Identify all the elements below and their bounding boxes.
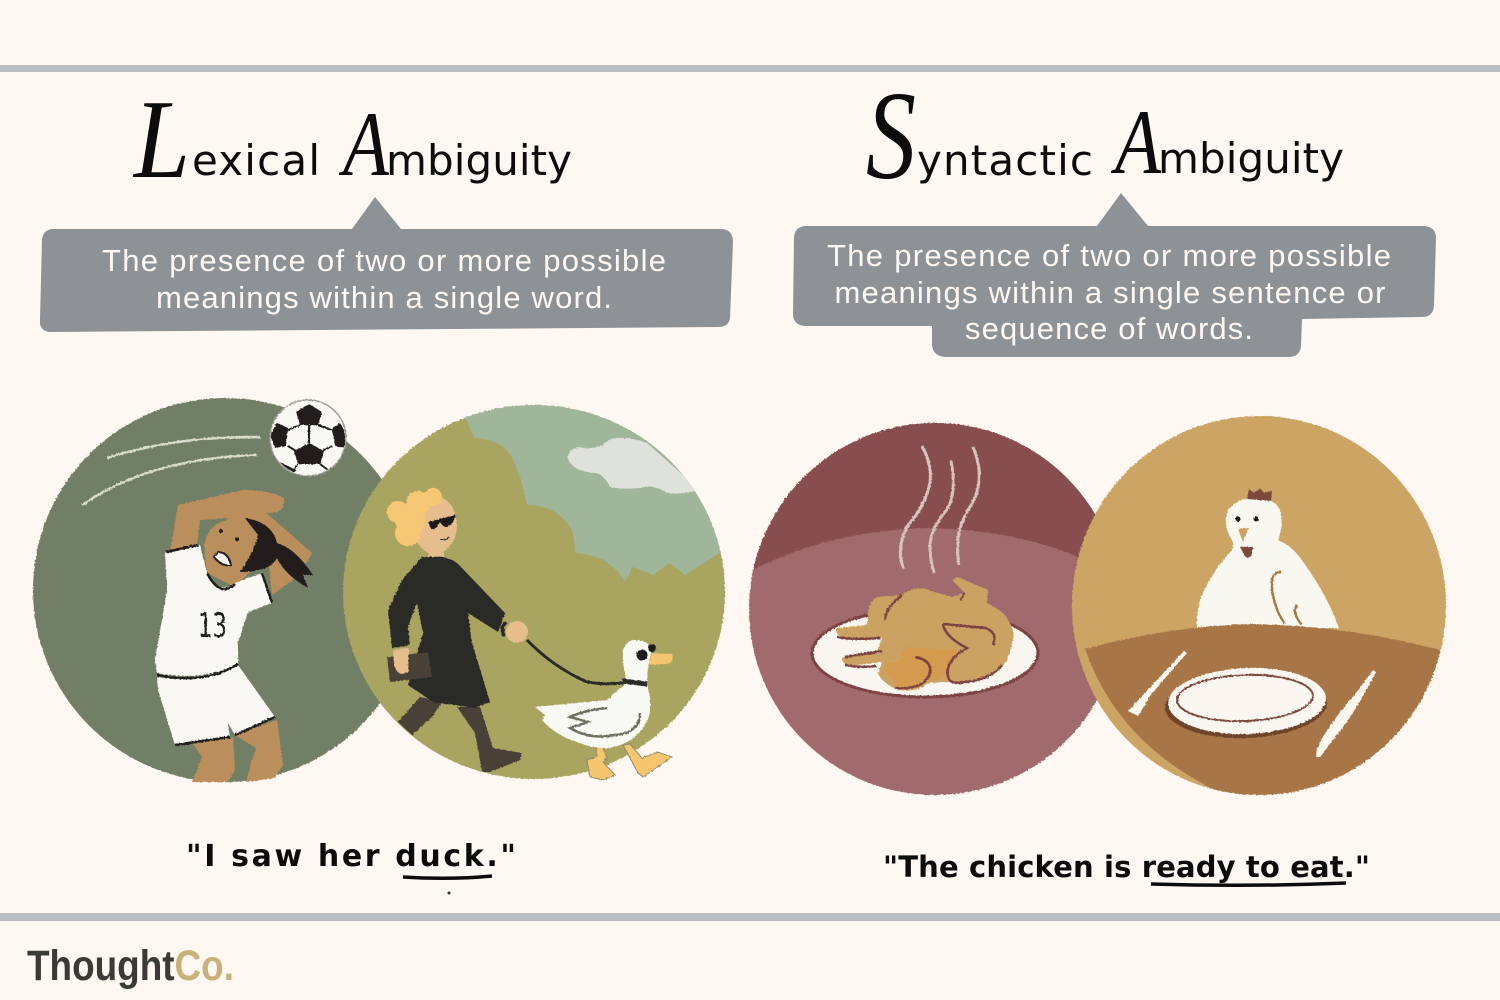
plate: [1164, 669, 1328, 741]
title: Syntactic Ambiguity: A: [1110, 91, 1162, 193]
callout: lexical definition: meanings within a single word.: [156, 280, 612, 315]
leash: [527, 640, 622, 684]
plate: [812, 609, 1038, 697]
player: [155, 490, 313, 782]
quote: I saw her duck: "I saw her duck.": [186, 839, 516, 874]
title: Lexical Ambiguity: [132, 78, 572, 202]
title: Lexical Ambiguity: L: [132, 78, 190, 202]
title: Lexical Ambiguity: A: [338, 93, 390, 195]
illustration: soccer player heading a ball: [33, 398, 417, 782]
steam: [900, 446, 979, 573]
quote: I saw her duck: [186, 839, 516, 894]
table: [1085, 624, 1450, 800]
illustration: woman walking a duck: [343, 380, 740, 780]
callout: syntactic definition: The presence of two or more possible: [827, 238, 1391, 273]
sky: [464, 404, 722, 582]
fork: [1128, 651, 1187, 716]
chicken: [837, 577, 1013, 691]
title: Syntactic Ambiguity: [866, 67, 1344, 206]
soccer ball: [270, 400, 347, 478]
quote: The chicken is ready to eat: "The chicken is ready to eat.": [883, 850, 1370, 884]
cloud: [567, 438, 700, 494]
title: Lexical Ambiguity: exical: [192, 136, 320, 185]
player: 13: [198, 606, 227, 646]
callout: lexical definition: The presence of two or more possible: [102, 243, 666, 278]
callout: syntactic definition: sequence of words.: [965, 311, 1253, 346]
title: Lexical Ambiguity: mbiguity: [386, 136, 572, 185]
title: Syntactic Ambiguity: mbiguity: [1158, 134, 1344, 183]
woman: [387, 488, 528, 772]
callout: lexical definition: [40, 197, 733, 332]
chicken: [1197, 488, 1339, 628]
title: Syntactic Ambiguity: yntactic: [917, 136, 1093, 185]
illustration: roast chicken on a plate: [748, 422, 1097, 796]
duck: [535, 640, 673, 780]
table edge: [753, 422, 1095, 570]
callout: syntactic definition: [793, 193, 1436, 357]
logo: ThoughtCo.: ThoughtCo.: [27, 942, 234, 990]
title: Syntactic Ambiguity: S: [866, 67, 916, 206]
callout: syntactic definition: meanings within a single sentence or: [834, 275, 1386, 310]
knife: [1316, 670, 1376, 757]
illustration: chicken at the table: [1072, 416, 1450, 800]
